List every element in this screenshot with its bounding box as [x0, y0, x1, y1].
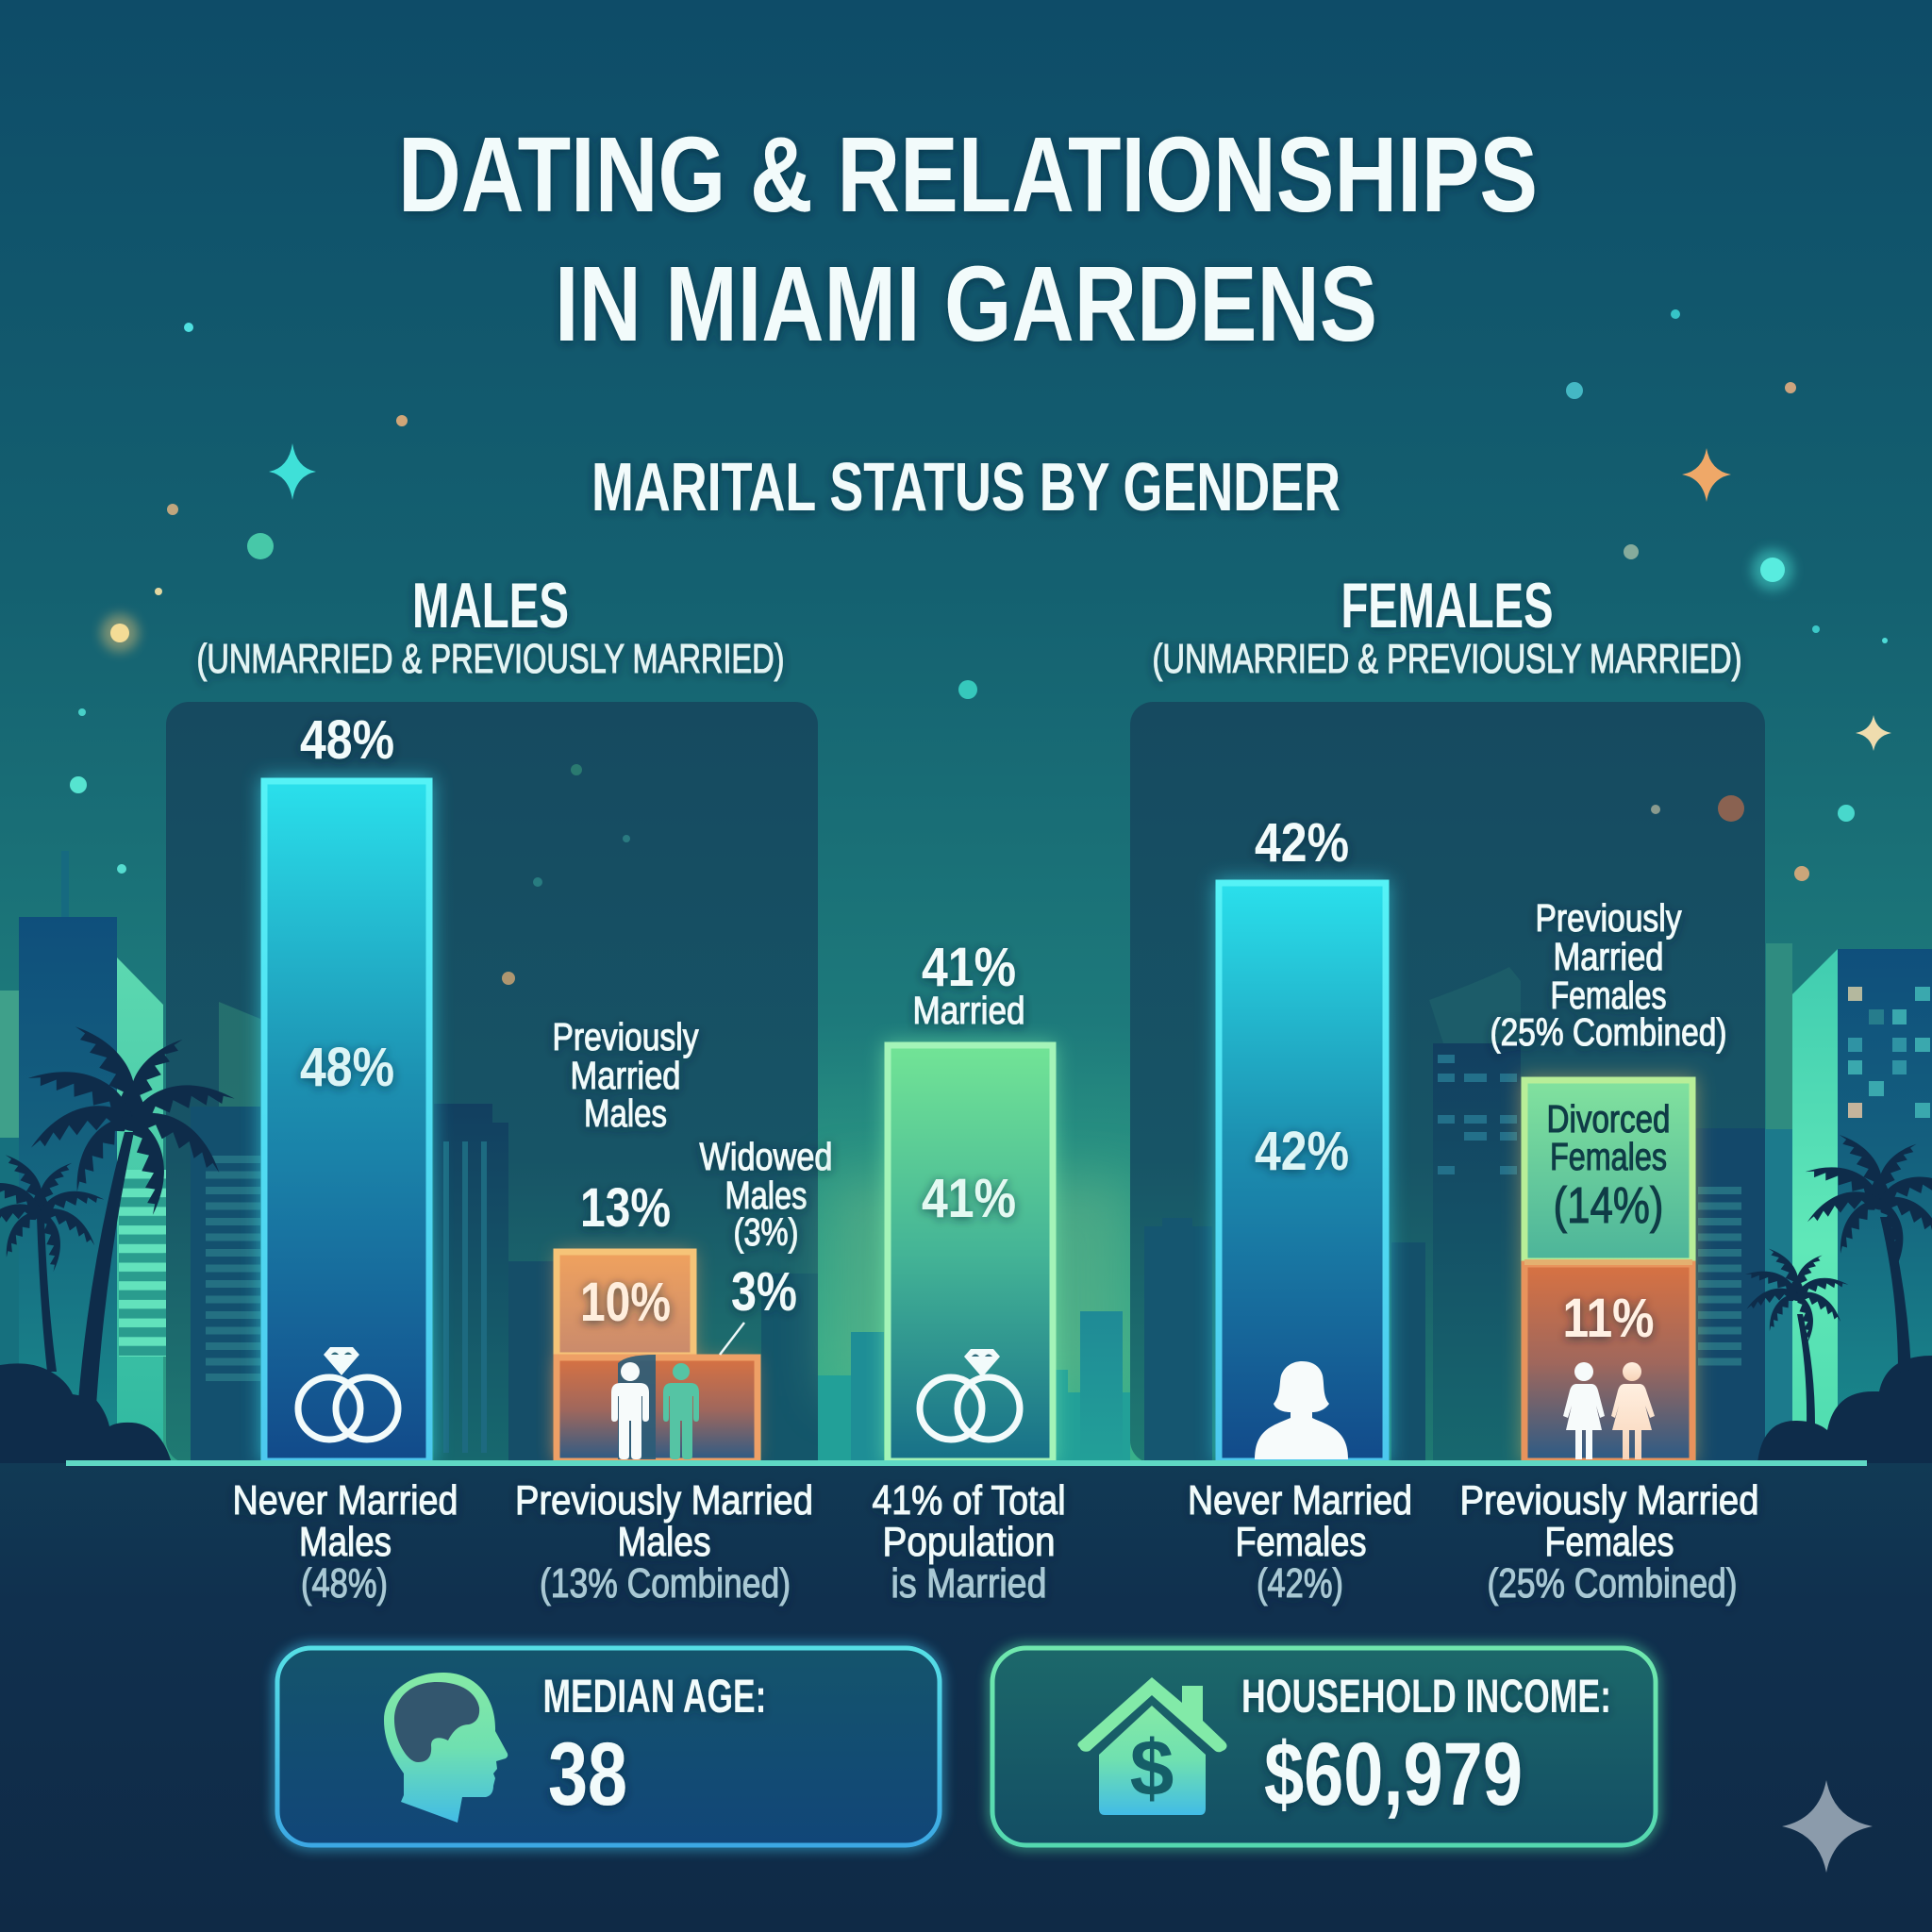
heading: females: (UNMARRIED & PREVIOUSLY MARRIED): [1153, 636, 1741, 682]
panel: females: [1130, 702, 1765, 1463]
label: median age: MEDIAN AGE:: [543, 1670, 766, 1723]
subtitle: MARITAL STATUS BY GENDER: [591, 450, 1341, 525]
females panel backdrop: [1130, 702, 1765, 1463]
panel: males: [166, 702, 832, 1463]
axis label: previously married females: Females: [1545, 1519, 1674, 1565]
axis label: total married: 41% of Total: [872, 1477, 1066, 1524]
heading: females: FEMALES: [1341, 570, 1553, 641]
bar: previously married males: 10%: [580, 1272, 671, 1333]
heading: males: (UNMARRIED & PREVIOUSLY MARRIED): [196, 636, 785, 682]
axis label: previously married females: [1460, 1477, 1758, 1607]
label: divorced females: (14%): [1553, 1177, 1664, 1234]
axis label: previously married males: (13% Combined): [540, 1560, 791, 1607]
label: divorced females: Divorced: [1547, 1097, 1670, 1141]
value: 48%: 48%: [300, 709, 394, 771]
value: 38: 38: [548, 1724, 627, 1824]
label: previously married females: Females: [1551, 974, 1666, 1017]
axis label: previously married females: Previously Married: [1460, 1477, 1758, 1524]
label: 41% married: 41%: [922, 937, 1016, 998]
axis label: never married females: Females: [1236, 1519, 1366, 1565]
males panel buildings: [191, 1002, 818, 1463]
axis label: never married males: Males: [299, 1519, 391, 1565]
icon: woman cream: [1611, 1362, 1655, 1459]
label: previously married males: Married: [570, 1054, 681, 1097]
axis label: previously married females: (25% Combined): [1487, 1560, 1738, 1607]
icon: house with dollar: $: [1130, 1724, 1174, 1812]
axis label: never married females: Never Married: [1188, 1477, 1412, 1524]
label: widowed males: (3%): [734, 1210, 798, 1254]
bar: never married males: [260, 777, 433, 1463]
card: median age: [277, 1648, 940, 1845]
value: 11%: 11%: [1562, 1288, 1655, 1349]
label: previously married males: Previously: [553, 1015, 699, 1058]
icon: female silhouette: [1255, 1361, 1348, 1459]
icon: head: [384, 1673, 508, 1823]
axis label: previously married males: [515, 1477, 813, 1607]
icon: woman white: [1563, 1362, 1605, 1459]
title: [398, 115, 1538, 363]
ground: [0, 1463, 1932, 1932]
value: 42%: 42%: [1255, 812, 1349, 874]
icon: man green: [663, 1363, 699, 1459]
label: divorced females: Females: [1550, 1135, 1667, 1178]
bar: never married females: 42%: [1255, 1121, 1349, 1182]
icon: man white: [611, 1362, 649, 1459]
bar: married: [884, 1042, 1056, 1463]
value: 41% inside: 41%: [922, 1168, 1016, 1229]
axis label: total married: is Married: [891, 1560, 1047, 1607]
heading: females: [1153, 570, 1741, 682]
leader line: [720, 1323, 744, 1355]
palms and hills right: [1743, 1125, 1932, 1463]
males panel backdrop: [166, 702, 818, 1463]
axis label: never married males: Never Married: [232, 1477, 458, 1524]
axis label: never married females: [1188, 1477, 1412, 1607]
title: DATING & RELATIONSHIPS: [398, 115, 1538, 234]
label: 41% married: [913, 937, 1024, 1032]
heading: males: [196, 570, 785, 682]
label: divorced females: [1547, 1097, 1670, 1234]
label: widowed males: Widowed: [700, 1135, 832, 1178]
label: widowed males: [700, 1135, 832, 1254]
skyline right: [1765, 943, 1932, 1463]
icon: wedding rings: [920, 1349, 1020, 1440]
axis label: previously married males: Previously Married: [515, 1477, 813, 1524]
bar: previously married females: [1521, 1076, 1696, 1463]
females panel buildings: [1144, 967, 1765, 1463]
stars and sparkles: [70, 309, 1891, 881]
axis label: previously married males: Males: [617, 1519, 711, 1565]
horizon glow: [0, 1019, 1932, 1811]
axis label: total married: Population: [883, 1519, 1055, 1565]
card: household income: [992, 1648, 1656, 1845]
dim dots: [502, 764, 630, 985]
icon: house with dollar: [1077, 1677, 1226, 1815]
value: 3%: 3%: [731, 1261, 797, 1323]
label: widowed males: Males: [724, 1174, 808, 1217]
heading: males: MALES: [412, 570, 569, 641]
dim dots: [1651, 795, 1744, 822]
skyline left: [0, 851, 166, 1463]
label: previously married females: [1491, 896, 1726, 1054]
value: 13%: 13%: [580, 1177, 671, 1239]
palms and hills left: [0, 1014, 235, 1463]
label: previously married females: (25% Combined): [1491, 1010, 1726, 1054]
bar: previously married males: [557, 1251, 758, 1461]
bar: never married females: [1215, 879, 1390, 1463]
axis label: never married females: (42%): [1257, 1560, 1343, 1607]
label: previously married females: Previously: [1536, 896, 1682, 940]
horizon line: [66, 1460, 1867, 1466]
axis label: never married males: (48%): [301, 1560, 388, 1607]
label: 41% married: Married: [913, 989, 1024, 1032]
label: household income: HOUSEHOLD INCOME:: [1241, 1670, 1611, 1723]
icon: wedding rings: [298, 1347, 398, 1440]
axis label: never married males: [232, 1477, 458, 1607]
title: IN MIAMI GARDENS: [555, 244, 1377, 363]
label: previously married males: Males: [584, 1091, 667, 1135]
mid skyline: [818, 1179, 1130, 1464]
bar: never married males: 48%: [300, 1037, 394, 1098]
value: income: $60,979: [1264, 1724, 1523, 1824]
corner sparkle: [1782, 1780, 1873, 1873]
label: previously married females: Married: [1553, 935, 1664, 978]
axis label: total married: [872, 1477, 1066, 1607]
label: previously married males: [553, 1015, 699, 1135]
